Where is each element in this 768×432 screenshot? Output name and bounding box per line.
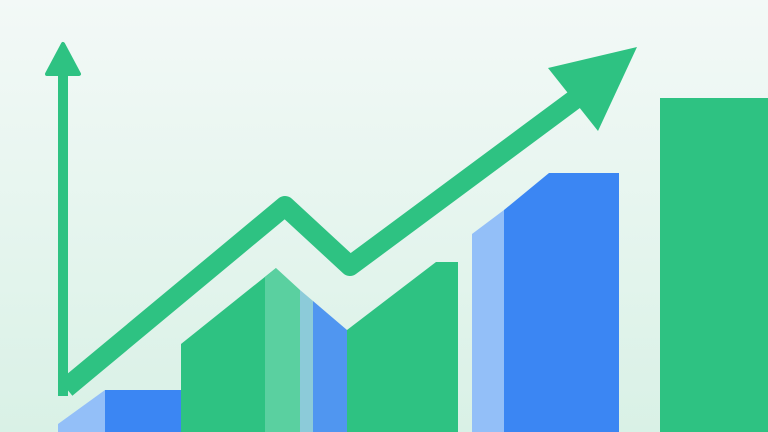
bar 2: green tall with strip bbox=[181, 268, 347, 432]
trend arrow bbox=[66, 47, 637, 388]
vertical axis arrow bbox=[47, 44, 79, 396]
bar 1: small blue bbox=[58, 390, 183, 432]
bar 4: blue tall bbox=[472, 173, 619, 432]
bar 5: green right bbox=[660, 98, 768, 432]
bar 3: green bbox=[347, 262, 458, 432]
